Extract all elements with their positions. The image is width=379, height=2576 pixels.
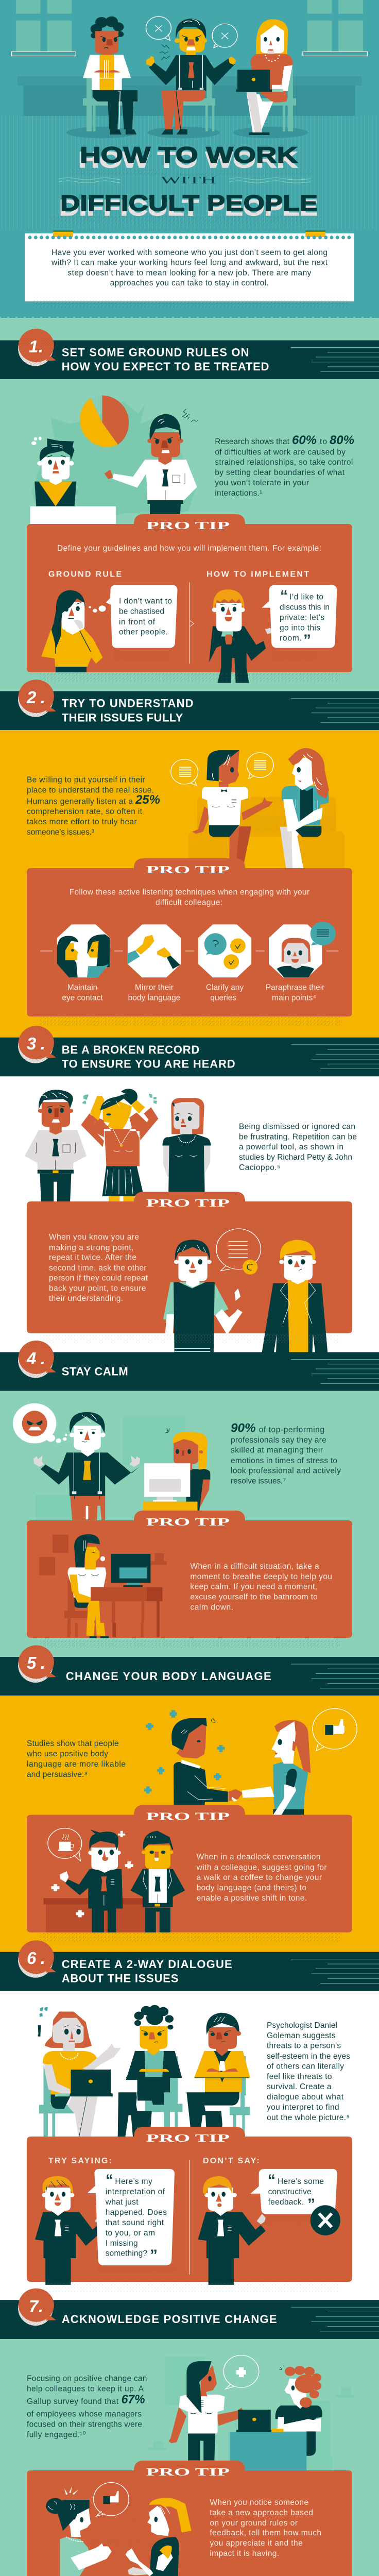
heading bar 4: 4.: [26, 1349, 45, 1368]
figure: calm man with thought bubble: [13, 1403, 140, 1520]
section 5 text: [26, 1739, 126, 1779]
heading bar 1: [0, 329, 379, 379]
octagon: clarify queries: [198, 924, 251, 977]
pro tip panel 1: room.: [280, 634, 302, 643]
section 3 text: Being dismissed or ignored can: [239, 1122, 355, 1131]
section 5 illustration: [144, 1708, 357, 1815]
heading bar 7: 7.: [29, 2297, 43, 2316]
section 1 statistic text: of difficulties at work are caused by: [215, 448, 346, 456]
heading bar 6: [0, 1940, 379, 1991]
pro tip panel 2: Follow these active listening techniques when engaging with your: [70, 888, 309, 896]
section 2 text: comprehension rate, so often it: [27, 807, 143, 816]
section 7 text: help colleagues to keep it up. A: [27, 2384, 144, 2393]
figure: woman breathing at desk: [39, 1534, 167, 1636]
section 7 text: Gallup survey found that: [27, 2397, 119, 2406]
pro tip panel 3: their understanding.: [49, 1294, 123, 1303]
panel: intro note: [25, 230, 354, 308]
pro tip panel 3: back your point, to ensure: [49, 1284, 146, 1293]
section 7 text: fully engaged.¹⁰: [27, 2431, 86, 2439]
figures: two women clapping: [46, 2483, 192, 2576]
section 6 text: [267, 2021, 350, 2122]
pro tip panel 3: person if they could repeat: [49, 1274, 148, 1283]
section 7 text: of employees whose managers: [27, 2410, 142, 2418]
pro tip panel 1: discuss this in: [280, 603, 330, 612]
title: DIFFICULT PEOPLE: [60, 191, 318, 216]
pro tip panel 3: PRO TIP: [146, 1197, 230, 1209]
pro tip panel 1: HOW TO IMPLEMENT: [206, 570, 309, 579]
pro tip panel 6: TRY SAYING:: [48, 2157, 112, 2165]
heading bar 4: STAY CALM: [62, 1365, 128, 1378]
section 4 text: professionals say they are: [231, 1436, 326, 1445]
section 3 text: Cacioppo.⁵: [239, 1163, 280, 1172]
pro tip panel 7: on your ground rules or: [210, 2519, 298, 2528]
pro tip panel 7: impact it is having.: [210, 2549, 279, 2558]
pro tip panel 3: making a strong point,: [49, 1243, 134, 1252]
pro tip panel 2: eye contact: [62, 993, 103, 1002]
pro tip panel 5: body language (and theirs) to: [197, 1884, 306, 1892]
heading bar 1: HOW YOU EXPECT TO BE TREATED: [62, 360, 269, 373]
section 1 statistic text: interactions.¹: [215, 489, 262, 498]
pro tip panel 2: main points⁴: [272, 993, 316, 1002]
figure: curly-haired colleague at desk: [230, 2365, 322, 2470]
sofa: [188, 797, 344, 869]
stipple shadow 1: [40, 673, 340, 682]
heading bar 5: CHANGE YOUR BODY LANGUAGE: [66, 1670, 271, 1683]
pro tip panel 4: moment to breathe deeply to help you: [190, 1572, 332, 1581]
pro tip panel 5: [27, 1805, 352, 1933]
section 1 statistic text: you won’t tolerate in your: [215, 479, 309, 487]
figure: handshake pair: [144, 1708, 357, 1815]
section 3 illustration: [25, 1089, 211, 1201]
pro tip panel 3: [27, 1192, 352, 1365]
heading bar 6: CREATE A 2-WAY DIALOGUE: [62, 1958, 232, 1971]
heading bar 3: 3.: [27, 1034, 45, 1053]
panel: header illustration: [0, 0, 379, 229]
figures: two colleagues walking for coffee: [43, 1828, 185, 1933]
pro tip panel 3: repeat it twice. After the: [49, 1253, 136, 1262]
pro tip panel 5: When in a deadlock conversation: [197, 1853, 320, 1861]
pro tip panel 5: enable a positive shift in tone.: [197, 1894, 307, 1903]
heading bar 3: BE A BROKEN RECORD: [62, 1043, 199, 1056]
section 5 text: Studies show that people: [27, 1739, 118, 1748]
figure: tired man: [25, 1090, 87, 1201]
figure lower part: [67, 1623, 160, 1638]
pro tip panel 1: other people.: [119, 628, 168, 637]
title: HOW TO WORK: [78, 147, 298, 173]
section 2 text: Be willing to put yourself in their: [27, 775, 145, 784]
pro tip panel 2: queries: [210, 993, 236, 1002]
section 6 text: threats to a person’s: [267, 2042, 341, 2050]
windows and desk backdrop: [0, 0, 379, 229]
pro tip panel 7: When you notice someone: [210, 2498, 308, 2507]
speech bubbles: [171, 753, 273, 786]
section 1 statistic text: [215, 433, 354, 498]
figure: woman at monitor: [143, 1428, 210, 1511]
heading bar 6: 6.: [27, 1948, 45, 1968]
heading bar 7: [0, 2289, 379, 2339]
section 6 text: you interpret to find: [267, 2103, 339, 2112]
pro tip panel 2: Clarify any: [206, 983, 244, 992]
section 6 text: Psychologist Daniel: [267, 2021, 337, 2030]
section 3 text: studies by Richard Petty & John: [239, 1153, 352, 1162]
pro tip panel 6: feedback.: [268, 2198, 304, 2207]
pro tip panel 7: [27, 2461, 352, 2576]
intro text: approaches you can take to stay in control.: [110, 279, 269, 287]
section 5 text: and persuasive.⁸: [27, 1770, 88, 1779]
section 6 illustration: [38, 2005, 250, 2139]
pro tip panel 1: be chastised: [119, 607, 164, 616]
section 3 text: [239, 1122, 357, 1172]
section 2 text: place to understand the real issue.: [27, 786, 154, 794]
heading bar 5: [0, 1646, 379, 1696]
pro tip panel 1: go into this: [280, 623, 320, 632]
section 6 text: of others can literally: [267, 2062, 344, 2071]
section 4 text: look professional and actively: [231, 1466, 341, 1476]
section 4 text: of top-performing: [259, 1426, 324, 1434]
pro tip panel 3: When you know you are: [49, 1233, 139, 1242]
octagon: mirror body language: [128, 924, 181, 977]
burst backdrop: [31, 401, 196, 521]
stipple shadow 5: [40, 1933, 340, 1942]
section 4 text: 90%: [231, 1421, 256, 1435]
octagon: eye contact: [57, 924, 110, 977]
pro tip panel 3: second time, ask the other: [49, 1264, 146, 1273]
heading bar 3: [0, 1026, 379, 1076]
section 1 statistic text: to: [320, 437, 327, 446]
octagon: paraphrase points: [269, 922, 336, 977]
pro tip panel 1: “: [280, 587, 288, 604]
section 2 text: 25%: [135, 793, 160, 807]
pro tip panel 1: PRO TIP: [146, 519, 230, 532]
pro tip panel 6: ”: [307, 2196, 315, 2213]
figure: blonde woman with laptop: [236, 19, 296, 135]
intro text: step doesn’t have to mean looking for a new job. There are many: [67, 268, 312, 277]
pro tip panel 4: When in a difficult situation, take a: [190, 1562, 319, 1571]
speech bubbles with crosses: [146, 16, 237, 48]
title: DIFFICULT PEOPLE: [59, 195, 318, 221]
section 5 text: language are more likable: [27, 1760, 126, 1769]
figure: yellow faced man, arms crossed: [118, 2005, 182, 2139]
section 5 text: who use positive body: [26, 1750, 108, 1758]
figure: worried colleague at desk: [30, 436, 116, 524]
pro tip panel 6: “: [106, 2172, 113, 2189]
pro tip panel 6: Here’s my: [115, 2177, 152, 2186]
pro tip panel 1: GROUND RULE: [48, 570, 122, 579]
pro tip panel 2: Maintain: [67, 983, 97, 992]
pro tip panel 2: PRO TIP: [146, 863, 230, 876]
pro tip panel 4: PRO TIP: [146, 1516, 230, 1528]
figure: arms-crossed man: [83, 16, 137, 134]
figure: angry man with suspenders: [146, 19, 236, 134]
figure: man replying, speech bubble: [216, 626, 240, 640]
section 2 text: someone’s issues.³: [27, 828, 94, 837]
figure: woman thinking, thought bubble: [41, 582, 337, 683]
section 4 text: skilled at managing their: [231, 1446, 323, 1455]
figure: listening woman, left: [192, 750, 272, 869]
heading bar 2: TRY TO UNDERSTAND: [62, 697, 194, 710]
intro text: [51, 248, 328, 287]
pro tip panel 5: PRO TIP: [146, 1810, 230, 1823]
pro tip panel 1: I don’t want to: [119, 597, 172, 606]
section 2 text: [27, 775, 160, 837]
section 1 statistic text: Research shows that: [215, 437, 290, 446]
title: WITH: [161, 175, 216, 186]
pro tip panel 4: [27, 1511, 352, 1638]
pro tip panel 1: Define your guidelines and how you will implement them. For example:: [57, 544, 321, 553]
figure: woman in black dress: [162, 1098, 211, 1192]
section 6 text: feel like threats to: [267, 2072, 332, 2081]
section 1 illustration: [30, 395, 198, 524]
title: HOW TO WORK: [80, 142, 298, 168]
section 7 illustration: [148, 2355, 354, 2471]
figure: angry manager pointing: [105, 409, 198, 515]
figure: woman giving praise: [168, 2355, 259, 2461]
stipple shadow 6: [40, 2282, 340, 2292]
pro tip panel 2: [27, 858, 352, 1016]
title: [49, 142, 322, 224]
pro tip panel 1: ”: [303, 632, 311, 649]
section 6 text: self-esteem in the eyes: [267, 2052, 350, 2061]
figure: brown man, yellow vest: [186, 2013, 250, 2139]
section 7 text: focused on their strengths were: [27, 2420, 142, 2429]
heading bar 6: ABOUT THE ISSUES: [62, 1972, 178, 1985]
heading bar 2: [0, 680, 379, 730]
section 2 text: Humans generally listen at a: [27, 798, 133, 806]
pro tip panel 2: body language: [128, 993, 180, 1002]
pro tip panel 7: take a new approach based: [210, 2509, 313, 2517]
pro tip panel 6: “: [268, 2172, 275, 2189]
heading bar 1: 1.: [29, 337, 43, 356]
heading bar 1: SET SOME GROUND RULES ON: [62, 346, 249, 359]
pro tip panel 6: that sound right: [106, 2218, 164, 2227]
figures: try saying / don't say: [35, 2160, 340, 2285]
section 3 text: be frustrating. Repetition can be: [239, 1132, 357, 1141]
section 7 text: 67%: [122, 2393, 145, 2406]
pro tip panel 6: interpretation of: [106, 2188, 165, 2196]
pro tip panel 1: I’d like to: [289, 593, 323, 602]
section 1 statistic text: by setting clear boundaries of what: [215, 468, 345, 477]
pro tip panel 6: happened. Does: [106, 2208, 167, 2217]
pro tip panel 6: constructive: [268, 2188, 312, 2196]
figure: listening woman, right: [280, 748, 329, 868]
pro tip panel 6: PRO TIP: [146, 2132, 230, 2144]
section 4 illustration: [13, 1403, 210, 1521]
section 4 text: resolve issues.⁷: [231, 1477, 286, 1486]
section 4 text: [231, 1421, 341, 1486]
pro tip panel 6: I missing: [106, 2239, 138, 2248]
pro tip panel 1: in front of: [119, 618, 156, 626]
pro tip panel 7: you appreciate it and the: [210, 2539, 303, 2548]
section 3 text: a powerful tool, as shown in: [239, 1143, 343, 1151]
heading bar 5: 5.: [27, 1653, 45, 1672]
heading bar 7: ACKNOWLEDGE POSITIVE CHANGE: [62, 2313, 277, 2326]
pro tip panel 7: feedback, tell them how much: [210, 2529, 321, 2537]
figure: woman with hands on head: [81, 1089, 158, 1201]
section 6 text: Goleman suggests: [267, 2031, 336, 2040]
pro tip panel 6: ”: [150, 2247, 158, 2264]
pro tip panel 6: [27, 2127, 352, 2285]
section 2 text: takes more effort to truly hear: [27, 818, 137, 826]
section 1 statistic text: 60%: [292, 433, 317, 447]
pro tip panel 5: with a colleague, suggest going for: [196, 1863, 327, 1872]
pro tip panel 2: difficult colleague:: [156, 899, 222, 907]
office backdrop: [36, 1416, 185, 1521]
pro tip panel 7: PRO TIP: [146, 2466, 230, 2478]
heading bar 3: TO ENSURE YOU ARE HEARD: [62, 1057, 235, 1071]
pro tip panel 1: [27, 514, 352, 683]
section 4 text: emotions in times of stress to: [231, 1456, 337, 1465]
pie chart: [80, 395, 129, 447]
section 2 illustration: [171, 748, 344, 869]
pro tip panel 6: Here’s some: [278, 2177, 324, 2186]
figures: repeating man and listener: [163, 1216, 329, 1365]
pro tip panel 6: to you, or am: [106, 2229, 155, 2238]
stipple shadow 2: [40, 1017, 340, 1026]
intro text: with? It can make your working hours feel long and awkward, but the next: [51, 259, 328, 267]
section 1 statistic text: 80%: [330, 433, 354, 447]
heading bar 2: THEIR ISSUES FULLY: [62, 711, 183, 724]
pro tip panel 4: keep calm. If you need a moment,: [190, 1583, 317, 1591]
section 7 text: [27, 2374, 147, 2439]
section 1 teal-mint wave edge: [0, 317, 379, 319]
pro tip panel 6: what just: [105, 2198, 139, 2207]
section 1 statistic text: strained relationships, so take control: [215, 458, 353, 467]
pro tip panel 4: excuse yourself to the bathroom to: [190, 1593, 318, 1602]
pro tip panel 6: DON’T SAY:: [203, 2157, 260, 2165]
section 6 text: survival. Create a: [267, 2082, 332, 2091]
figure: woman with laptop: [38, 2007, 121, 2137]
pro tip panel 2: Paraphrase their: [266, 983, 324, 992]
pro tip panel 2: Mirror their: [135, 983, 174, 992]
pro tip panel 5: a walk or a coffee to change your: [197, 1873, 322, 1882]
pro tip panel 4: calm down.: [190, 1603, 233, 1612]
heading bar 2: 2.: [26, 688, 45, 707]
intro text: Have you ever worked with someone who you just don’t seem to get along: [51, 248, 328, 257]
pro tip panel 1: private: let’s: [280, 613, 324, 622]
section 6 text: dialogue about what: [267, 2093, 344, 2102]
heading bar 4: [0, 1341, 379, 1391]
stipple shadow 4: [40, 1638, 340, 1648]
pro tip panel 6: something?: [106, 2249, 147, 2258]
section 6 text: out the whole picture.⁹: [267, 2113, 350, 2122]
stipple shadow 3: [40, 1334, 340, 1343]
section 7 text: Focusing on positive change can: [27, 2374, 147, 2383]
